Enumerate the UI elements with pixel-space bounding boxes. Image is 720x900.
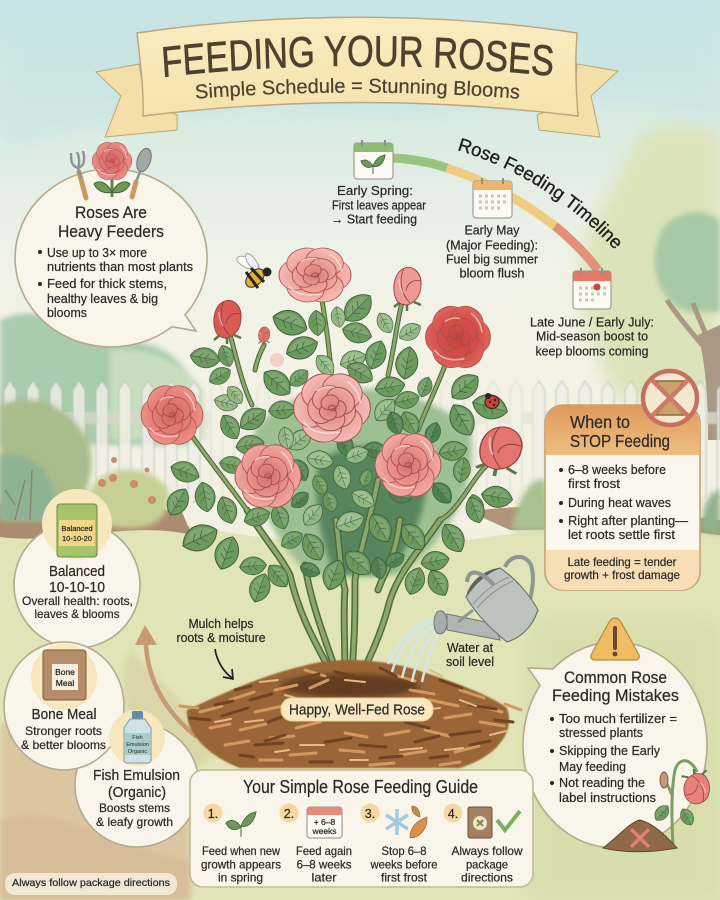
panel: fish emulsion bubble — [75, 723, 199, 847]
text: early spring: → Start feeding — [331, 212, 417, 226]
title banner — [95, 16, 619, 138]
step 3 — [360, 804, 438, 884]
text: late june: keep blooms coming — [536, 344, 649, 358]
step 3: Stop 6–8 — [382, 844, 427, 858]
step 3: first frost — [381, 870, 428, 884]
bullet list — [550, 711, 677, 805]
callout: mulch: roots & moisture — [176, 631, 266, 645]
callout — [564, 555, 680, 582]
step 3: weeks before — [370, 858, 438, 872]
text: late june — [530, 316, 654, 358]
bullet list: stressed plants — [559, 725, 643, 740]
heading: STOP Feeding — [570, 431, 670, 451]
step 1: growth appears — [201, 858, 281, 872]
icon: warning triangle — [591, 618, 639, 660]
panel: common mistakes — [523, 618, 712, 852]
bullet list: healthy leaves & big — [47, 291, 158, 306]
step 1: Feed when new — [202, 844, 280, 858]
panel: balanced fertilizer: leaves & blooms — [34, 607, 120, 621]
main title: FEEDING YOUR ROSES — [163, 35, 553, 78]
step 2: 6–8 weeks — [296, 858, 352, 872]
panel: bone meal: Stronger roots — [25, 724, 102, 738]
panel: bone meal — [4, 642, 124, 770]
heading — [570, 412, 670, 451]
panel: balanced fertilizer — [14, 489, 140, 648]
step 4: package — [466, 858, 508, 872]
icon: fish emulsion bottle: Fish — [132, 735, 143, 741]
callout: water at soil level: Water at — [447, 641, 494, 655]
label: happy well-fed rose: Happy, Well-Fed Rose — [289, 702, 425, 718]
foliage backdrop — [253, 389, 472, 575]
bullet list: let roots settle first — [568, 527, 675, 542]
icon: bumblebee — [235, 252, 272, 291]
mulch mound — [180, 660, 521, 768]
icon: fish emulsion bottle: Organic — [128, 749, 147, 755]
fish emulsion content: & leafy growth — [96, 815, 173, 829]
icon: calendar late june — [573, 268, 611, 309]
step 4: 4. — [448, 807, 458, 821]
step 2: Feed again — [296, 844, 352, 858]
fish emulsion content: Boosts stems — [99, 801, 170, 815]
icon: bone meal bag: Meal — [56, 678, 74, 688]
icon: balanced bag — [57, 504, 97, 557]
step 1 — [201, 804, 281, 884]
bullet list: Feed for thick stems, — [47, 276, 167, 291]
step 4: directions — [461, 870, 513, 884]
step 1: 1. — [208, 807, 218, 821]
bullet list: nutrients than most plants — [47, 259, 193, 274]
icon: calendar early may — [473, 178, 512, 218]
icon: wilted rose and fertilizer pile — [603, 761, 712, 852]
icon: ladybug — [485, 393, 499, 408]
leaves — [162, 288, 514, 605]
label: happy well-fed rose — [281, 698, 433, 721]
arrow: upward curved — [135, 625, 197, 737]
heading — [58, 203, 164, 241]
roses — [141, 243, 525, 513]
bullet list: blooms — [47, 305, 87, 320]
note: always follow package directions — [5, 873, 177, 895]
step 2 — [280, 804, 352, 884]
icon: no hourglass — [643, 371, 697, 425]
panel: balanced fertilizer: Balanced — [49, 563, 105, 580]
note: always follow package directions: Always follow package directions — [12, 877, 170, 889]
step 3: 3. — [365, 807, 375, 821]
heading: Your Simple Rose Feeding Guide — [243, 777, 478, 797]
text: late june: Late June / Early July: — [530, 316, 654, 330]
bullet list — [38, 245, 193, 320]
timeline arc — [393, 158, 598, 270]
text: early may: bloom flush — [460, 266, 525, 280]
panel: balanced fertilizer: 10-10-10 — [49, 579, 105, 596]
text: early spring: First leaves appear — [332, 198, 426, 212]
panel: bone meal: Bone Meal — [32, 706, 96, 723]
panel: bone meal: & better blooms — [21, 738, 106, 752]
heading: Common Rose — [564, 668, 667, 687]
icon: bone meal bag: Bone — [55, 667, 75, 677]
icon: balanced bag: 10-10-20 — [62, 534, 92, 543]
step 1: in spring — [218, 870, 263, 884]
bullet list: May feeding — [559, 759, 626, 774]
icon: bone meal bag — [43, 650, 86, 700]
step 4: Always follow — [452, 844, 523, 858]
icon: fish emulsion bottle — [124, 711, 151, 763]
text: early spring — [331, 184, 426, 226]
text: early spring: Early Spring: — [337, 184, 413, 198]
step 2: later — [312, 870, 337, 884]
step 4 — [444, 804, 523, 884]
step 2: 2. — [284, 807, 294, 821]
step 2: + 6–8 — [314, 817, 336, 827]
callout: mulch — [176, 617, 266, 679]
subtitle: Simple Schedule = Stunning Blooms — [196, 78, 520, 100]
callout: water at soil level — [446, 641, 494, 669]
timeline title: Rose Feeding Timeline — [458, 138, 620, 248]
icon: fish emulsion bottle: Emulsion — [126, 742, 149, 748]
callout: water at soil level: soil level — [446, 655, 494, 669]
text: early may: Fuel big summer — [446, 252, 538, 266]
icon: watering can — [388, 557, 538, 682]
text: early may: (Major Feeding): — [446, 238, 538, 252]
text: early may: Early May — [464, 224, 520, 238]
panel: simple rose feeding guide — [190, 770, 533, 887]
bullet list: first frost — [568, 476, 620, 491]
bullet list: 6–8 weeks before — [568, 462, 666, 477]
stems — [190, 300, 490, 682]
callout: Late feeding = tender — [568, 555, 676, 569]
heading — [552, 668, 679, 705]
fish emulsion content — [93, 710, 180, 829]
icon: calendar early spring — [354, 140, 393, 179]
icon: fork, rose and spoon — [71, 139, 154, 198]
panel: roses are heavy feeders — [15, 139, 207, 347]
icon: balanced bag: Balanced — [61, 524, 93, 533]
heading: Heavy Feeders — [58, 222, 164, 241]
bullet list: Too much fertilizer = — [559, 711, 677, 726]
bullet list: Right after planting— — [568, 513, 688, 528]
text: early may — [446, 224, 538, 280]
panel: when to stop feeding — [545, 371, 700, 590]
heading: Feeding Mistakes — [552, 686, 679, 705]
bullet list: Skipping the Early — [559, 743, 660, 758]
fish emulsion content: (Organic) — [108, 785, 166, 801]
callout: mulch: Mulch helps — [188, 617, 254, 631]
bullet list: Use up to 3× more — [47, 245, 147, 260]
fish emulsion content: Fish Emulsion — [93, 768, 180, 784]
panel: balanced fertilizer: Overall health: roots, — [22, 594, 133, 608]
rose bush illustration — [141, 243, 525, 682]
heading: Roses Are — [75, 203, 147, 222]
bullet list: During heat waves — [568, 495, 671, 510]
heading: When to — [570, 412, 630, 432]
text: late june: Mid-season boost to — [536, 330, 648, 344]
callout: growth + frost damage — [564, 568, 680, 582]
bullet list: label instructions — [559, 790, 656, 805]
bullet list: Not reading the — [559, 775, 645, 790]
step 2: weeks — [311, 826, 337, 836]
bullet list — [559, 462, 688, 542]
